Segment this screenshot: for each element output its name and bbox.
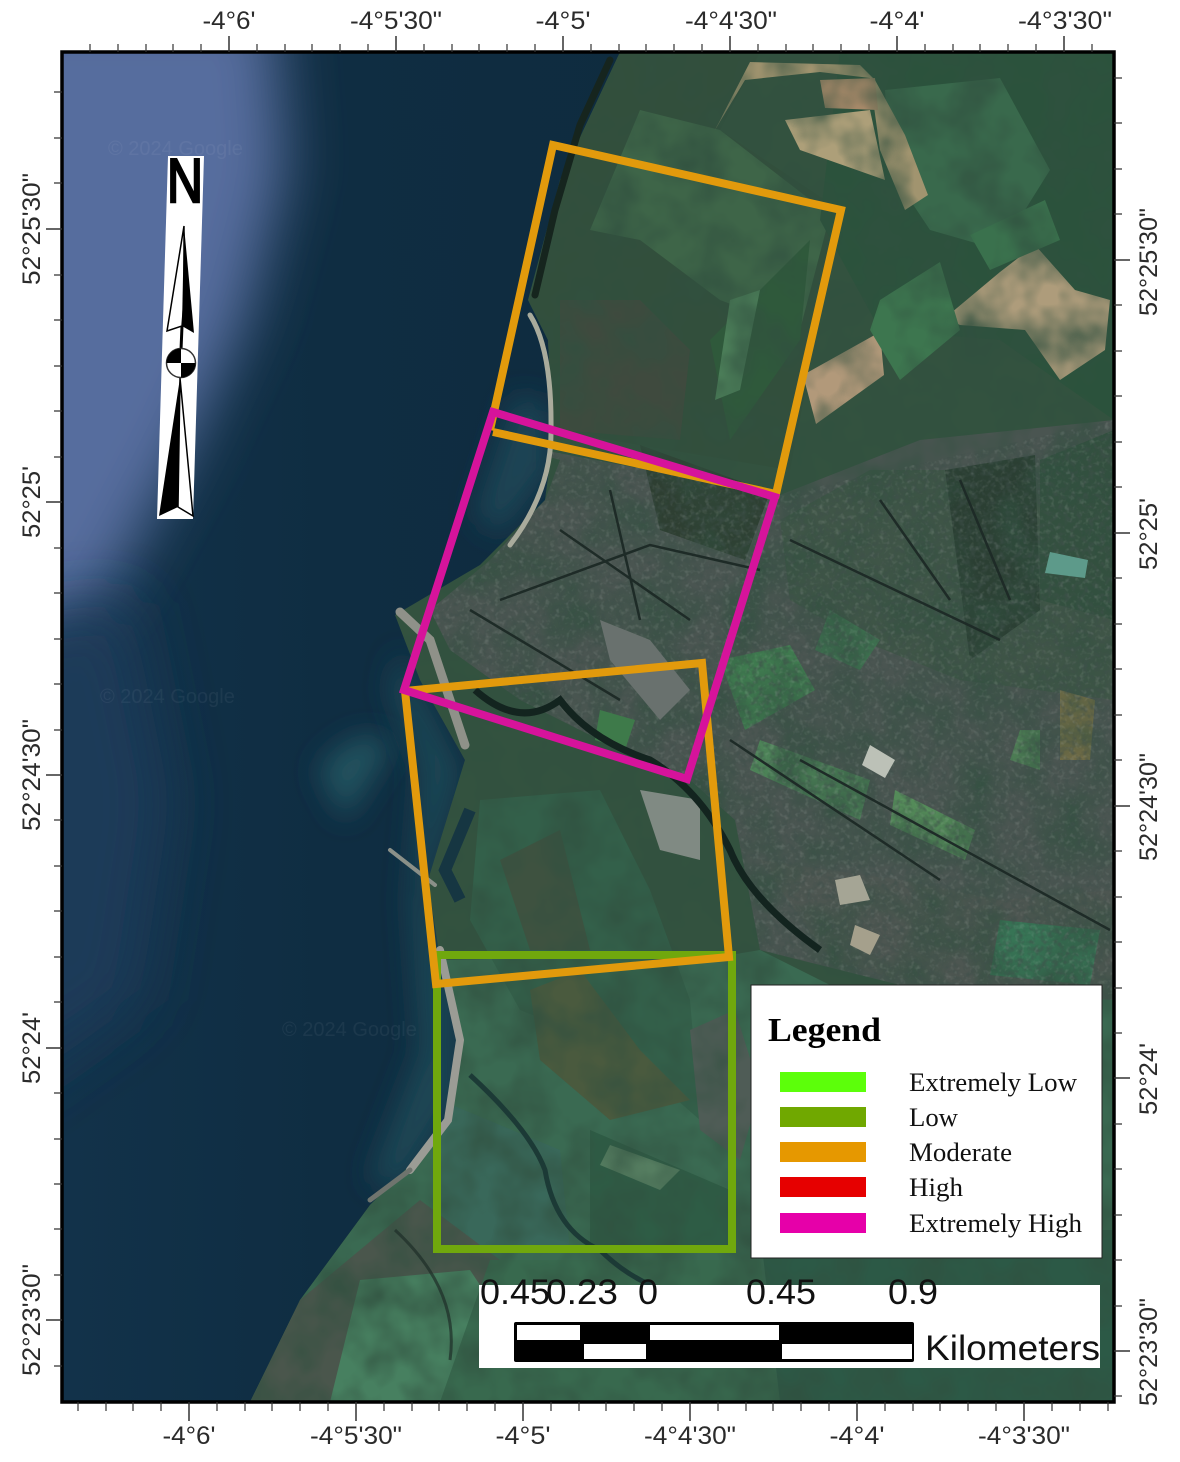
left latitude labels: 52°25' <box>18 466 46 538</box>
right latitude labels: 52°23'30" <box>1135 1298 1163 1406</box>
scale bar: 0.9 <box>888 1273 938 1312</box>
legend item: high: High <box>909 1173 963 1202</box>
inland green patches <box>720 645 815 730</box>
street lines <box>470 480 1110 930</box>
top longitude labels: -4°5'30" <box>350 7 442 35</box>
legend item: moderate <box>780 1138 1012 1167</box>
legend item: high <box>780 1173 963 1202</box>
watermarks: © 2024 Google <box>108 138 243 160</box>
top longitude labels: -4°3'30" <box>1018 7 1112 35</box>
scale bar: 0 <box>638 1273 658 1312</box>
river <box>475 690 820 950</box>
legend item: low <box>780 1103 958 1132</box>
north arrow <box>157 147 204 519</box>
scale bar: 0.45 <box>480 1273 550 1312</box>
legend item: low: Low <box>909 1103 958 1132</box>
top longitude labels: -4°4' <box>870 7 924 35</box>
zone: moderate, central-south <box>405 663 729 984</box>
right latitude labels <box>1135 208 1163 1406</box>
texture: dark and light specks <box>240 52 1120 1402</box>
urban south east <box>760 860 1114 990</box>
town ground <box>430 420 1114 1010</box>
scale bar: 0.45 <box>746 1273 816 1312</box>
beaches and breakwaters <box>370 60 610 1200</box>
legend item: moderate: Moderate <box>909 1138 1012 1167</box>
sea: © 2024 Google <box>100 686 235 708</box>
bottom longitude labels: -4°4' <box>830 1422 884 1450</box>
bottom longitude labels: -4°5'30" <box>310 1422 402 1450</box>
bottom longitude labels: -4°4'30" <box>644 1422 736 1450</box>
right latitude labels: 52°24' <box>1135 1043 1163 1115</box>
bottom longitude labels: -4°6' <box>162 1422 216 1450</box>
NE fields <box>715 52 1114 424</box>
sea: © 2024 Google <box>282 1019 417 1041</box>
bottom longitude labels: -4°5' <box>496 1422 550 1450</box>
zone: moderate, northern <box>490 145 841 494</box>
bottom longitude labels: -4°3'30" <box>978 1422 1070 1450</box>
zone: extremely high <box>404 412 775 779</box>
northern hills <box>490 52 840 470</box>
top longitude labels: -4°6' <box>202 7 256 35</box>
top longitude labels: -4°4'30" <box>685 7 777 35</box>
north arrow: N <box>167 147 203 216</box>
left latitude labels: 52°24'30" <box>18 719 46 831</box>
scale bar <box>479 1273 1100 1368</box>
left latitude labels <box>18 173 46 1376</box>
top longitude labels <box>202 7 1112 35</box>
top longitude labels: -4°5' <box>536 7 590 35</box>
legend item: extremely high <box>780 1209 1082 1238</box>
zone: low, southern <box>437 955 732 1249</box>
land <box>240 52 1120 1402</box>
left latitude labels: 52°23'30" <box>18 1264 46 1376</box>
building blocks <box>600 620 690 720</box>
legend item: extremely low <box>780 1068 1077 1097</box>
right latitude labels: 52°25'30" <box>1135 208 1163 316</box>
legend title: Legend <box>768 1012 881 1049</box>
legend item: extremely high: Extremely High <box>909 1209 1082 1238</box>
legend item: extremely low: Extremely Low <box>909 1068 1077 1097</box>
legend panel <box>751 985 1102 1258</box>
right latitude labels: 52°24'30" <box>1135 753 1163 861</box>
south green land <box>250 950 1114 1402</box>
left latitude labels: 52°24' <box>18 1012 46 1084</box>
right latitude labels: 52°25' <box>1135 498 1163 570</box>
scale bar: Kilometers <box>925 1329 1100 1368</box>
sea <box>64 54 620 1400</box>
bottom longitude labels <box>162 1422 1070 1450</box>
scale bar: 0.23 <box>546 1273 618 1312</box>
left latitude labels: 52°25'30" <box>18 173 46 285</box>
